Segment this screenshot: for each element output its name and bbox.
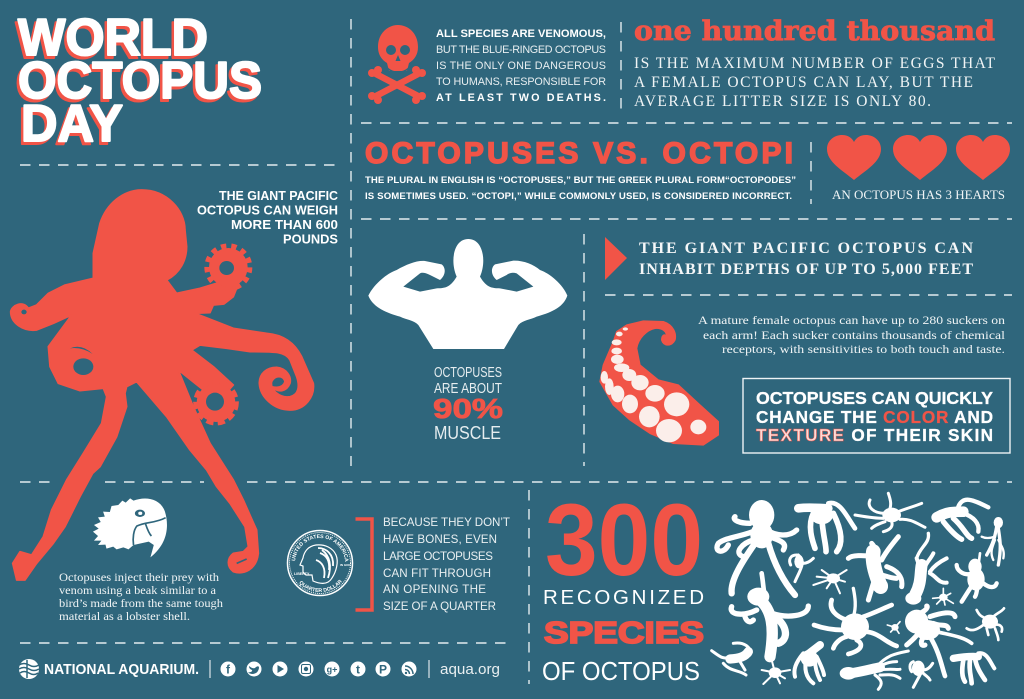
icons: social media: g+ — [327, 664, 337, 674]
title: WORLD — [18, 9, 208, 67]
text: egg facts: IS THE MAXIMUM NUMBER OF EGGS THAT — [634, 55, 996, 72]
text: no bones fact: BECAUSE THEY DON’T — [383, 516, 510, 529]
title: DAY — [21, 95, 123, 153]
title: DAY — [18, 98, 120, 156]
heading: octopuses vs octopi: OCTOPUSES VS. OCTOPI — [365, 137, 793, 170]
callout box: color and texture: TEXTURE OF THEIR SKIN — [756, 425, 993, 445]
heading: one hundred thousand: one hundred thousand — [634, 16, 995, 47]
text: depth fact: INHABIT DEPTHS OF UP TO 5,000 FEET — [639, 261, 973, 278]
text: venomous species: ALL SPECIES ARE VENOMOUS, — [436, 28, 606, 40]
link text: aqua.org: aqua.org — [440, 661, 500, 678]
text: beak fact: Octopuses inject their prey with — [59, 571, 219, 584]
text: 90% muscle: 90% — [433, 393, 503, 424]
stat: 300 recognized species: SPECIES — [544, 615, 704, 650]
bracket: coin to text — [356, 519, 372, 610]
text: venomous species: IS THE ONLY ONE DANGEROUS — [436, 60, 606, 72]
footer: logo and social links — [19, 659, 500, 679]
icon: quarter dollar coin: LIBERTY — [294, 572, 310, 576]
icon: quarter dollar coin — [286, 530, 354, 596]
text: egg facts: AVERAGE LITTER SIZE IS ONLY 80. — [634, 93, 931, 110]
text: suckers fact: A mature female octopus can have up to 280 suckers on — [698, 313, 1005, 327]
callout: giant pacific octopus weight: POUNDS — [283, 232, 338, 246]
callout box: color and texture: OCTOPUSES CAN QUICKLY — [756, 388, 994, 408]
text: 90% muscle: OCTOPUSES — [434, 364, 502, 381]
callout: giant pacific octopus weight: MORE THAN 600 — [231, 218, 338, 232]
text: depth fact: THE GIANT PACIFIC OCTOPUS CAN — [639, 240, 973, 257]
text: no bones fact: AN OPENING THE — [383, 583, 486, 596]
text: plural explanation: THE PLURAL IN ENGLISH IS “OCTOPUSES,” BUT THE GREEK PLURAL FORM“OCTOPODES” — [365, 175, 796, 186]
text: beak fact: material as a lobster shell. — [59, 610, 190, 623]
text: egg facts: A FEMALE OCTOPUS CAN LAY, BUT THE — [634, 74, 973, 91]
text: 90% muscle — [433, 364, 503, 443]
logo: national aquarium — [19, 659, 199, 679]
icon: skull and crossbones — [368, 25, 426, 104]
icon: flexing muscleman — [368, 239, 567, 349]
stat: 300 recognized species: OF OCTOPUS — [542, 656, 700, 686]
text: venomous species — [436, 28, 606, 104]
text: suckers fact — [698, 313, 1006, 356]
icon: tentacle with suckers — [600, 321, 718, 445]
illustration: giant octopus silhouette — [11, 190, 314, 580]
callout: giant pacific octopus weight: THE GIANT PACIFIC — [219, 189, 338, 203]
illustration: many octopus silhouettes — [712, 493, 1004, 689]
stat: 300 recognized species — [542, 483, 704, 686]
text: suckers fact: receptors, with sensitivities to both touch and taste. — [722, 342, 1005, 356]
icon: parrot head — [93, 498, 167, 557]
text: venomous species: TO HUMANS, RESPONSIBLE FOR — [436, 76, 606, 88]
icon: quarter dollar coin: QUARTER DOLLAR — [300, 580, 342, 592]
text: beak fact: bird’s made from the same tough — [59, 597, 223, 610]
text: depth fact — [639, 240, 973, 278]
logo: national aquarium: NATIONAL AQUARIUM. — [44, 662, 199, 678]
icon: quarter dollar coin: UNITED STATES OF AMERICA — [292, 534, 348, 562]
text: no bones fact: HAVE BONES, EVEN — [383, 533, 497, 546]
callout: giant pacific octopus weight: OCTOPUS CAN WEIGH — [197, 204, 338, 218]
text: no bones fact — [383, 516, 510, 613]
text: plural explanation — [365, 175, 796, 202]
title: OCTOPUS — [18, 52, 262, 110]
stat: 300 recognized species: RECOGNIZED — [543, 586, 704, 609]
title: OCTOPUS — [16, 55, 260, 113]
icon: red arrow triangle — [605, 237, 627, 280]
text: beak fact: venom using a beak similar to a — [59, 584, 216, 597]
text: venomous species: BUT THE BLUE-RINGED OCTOPUS — [436, 44, 606, 56]
callout box: color and texture: CHANGE THE COLOR AND — [756, 407, 993, 427]
text: no bones fact: SIZE OF A QUARTER — [383, 600, 496, 613]
text: 90% muscle: MUSCLE — [434, 423, 501, 443]
icons: social media: P — [379, 662, 387, 676]
text: no bones fact: CAN FIT THROUGH — [383, 567, 491, 580]
icons: social media: t — [356, 662, 360, 676]
icon: three hearts — [827, 135, 1010, 180]
text: suckers fact: each arm! Each sucker contains thousands of chemical — [703, 328, 1006, 342]
text: egg facts — [634, 55, 996, 110]
text: hearts caption: AN OCTOPUS HAS 3 HEARTS — [832, 188, 1005, 202]
text: plural explanation: IS SOMETIMES USED. “OCTOPI,” WHILE COMMONLY USED, IS CONSIDERED INCORRECT. — [365, 191, 792, 202]
text: 90% muscle: ARE ABOUT — [434, 380, 502, 397]
title: WORLD — [16, 12, 206, 70]
icons: social media — [220, 662, 416, 676]
text: beak fact — [59, 571, 223, 623]
stat: 300 recognized species: 300 — [545, 483, 703, 597]
text: no bones fact: LARGE OCTOPUSES — [383, 550, 493, 563]
title — [16, 9, 262, 156]
callout box: color and texture — [743, 378, 1010, 453]
callout: giant pacific octopus weight — [197, 189, 338, 246]
icon: quarter dollar coin: IN GOD — [340, 563, 352, 567]
text: venomous species: AT LEAST TWO DEATHS. — [436, 92, 606, 104]
icons: social media: f — [226, 662, 231, 676]
